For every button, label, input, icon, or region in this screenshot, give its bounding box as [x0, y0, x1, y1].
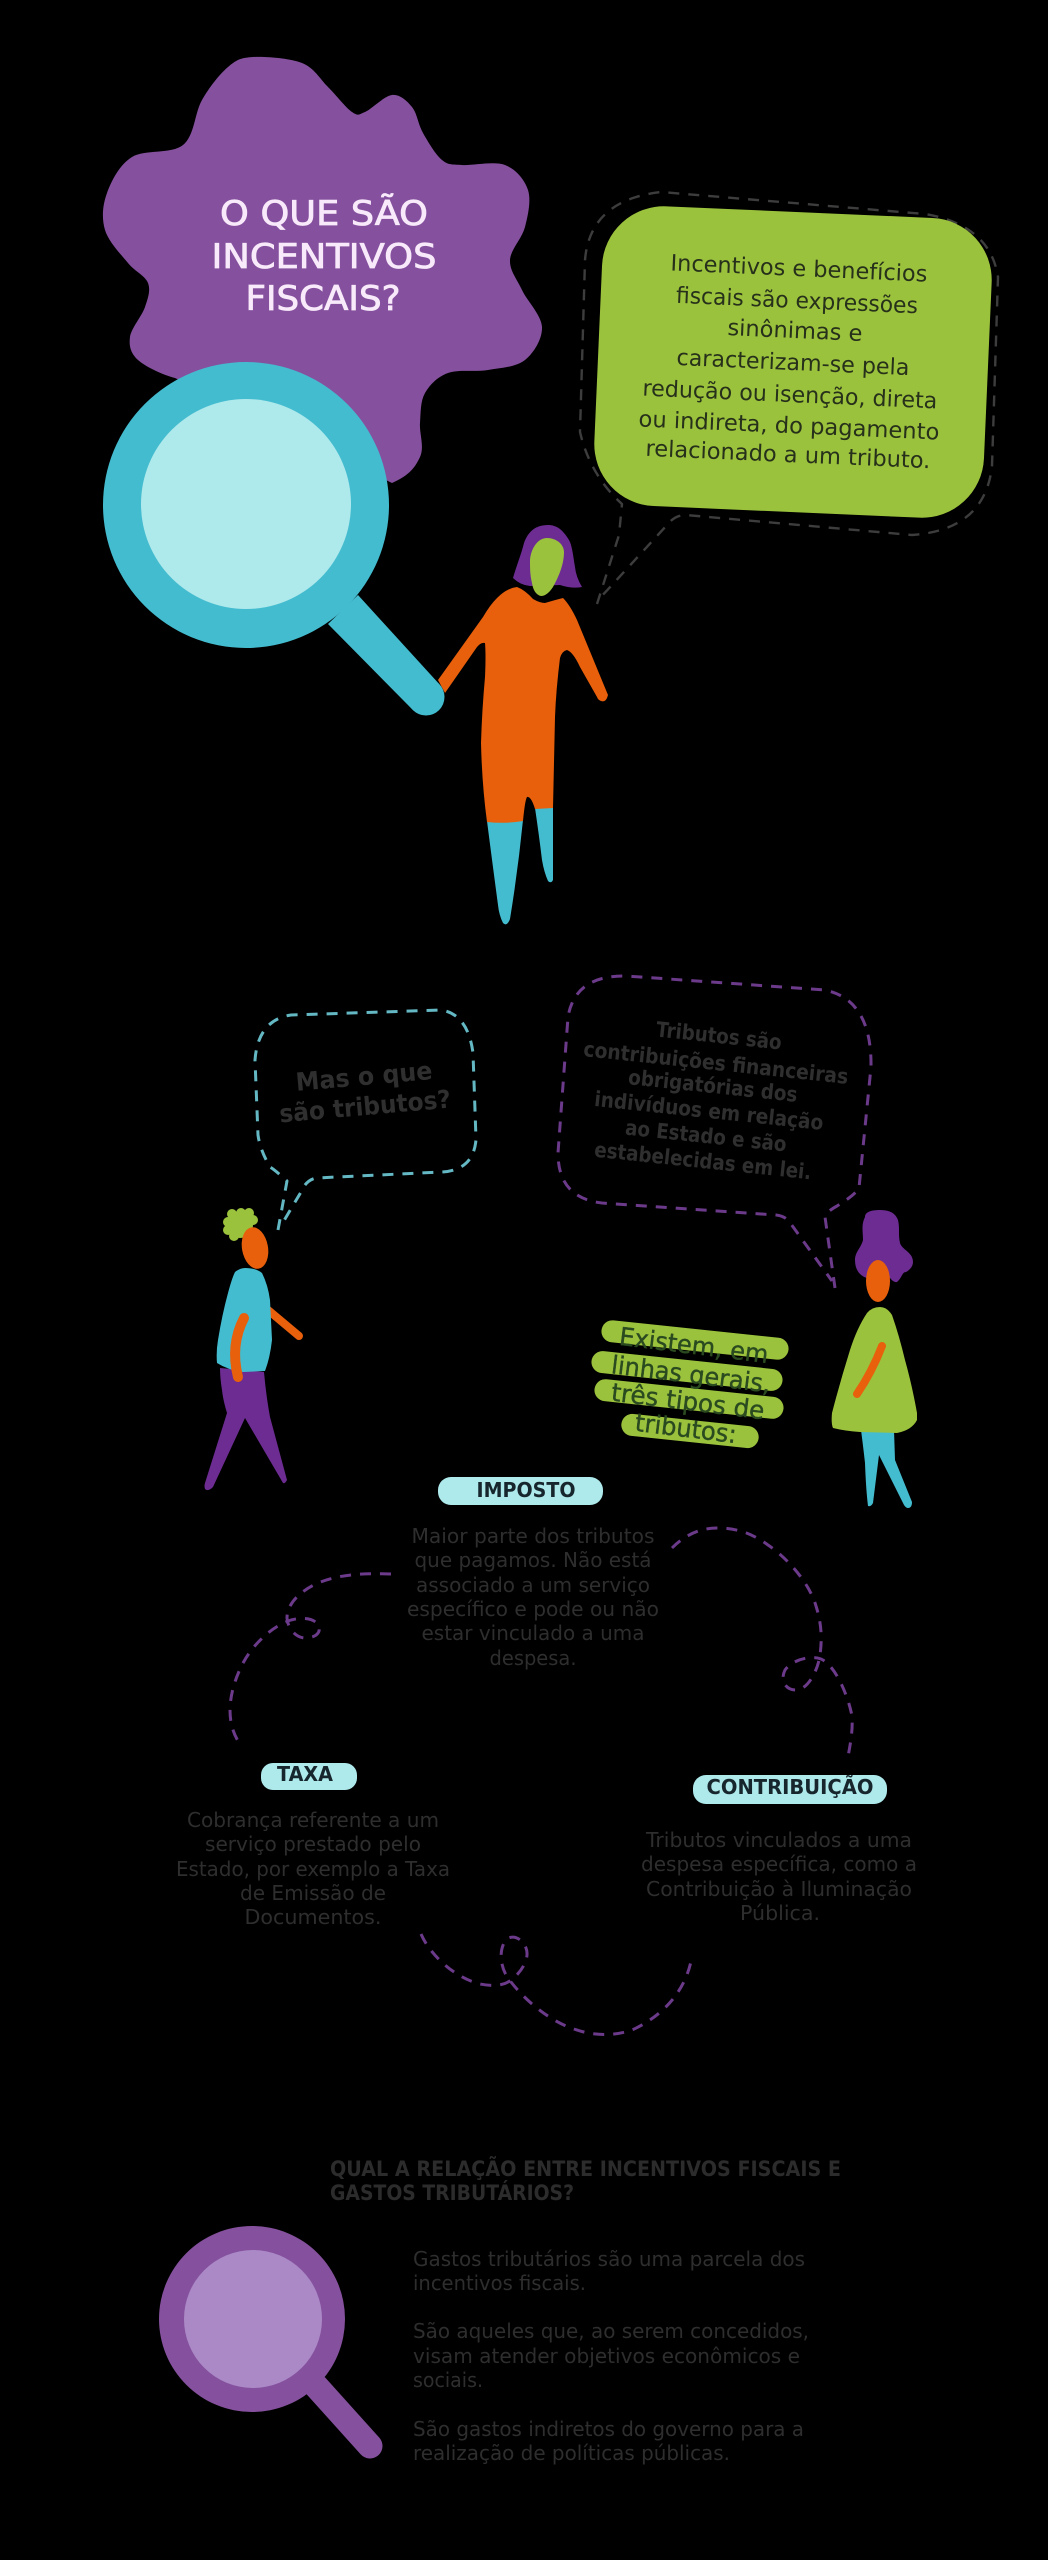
- purple blob: [103, 57, 542, 483]
- description: Contribuição à Iluminação: [646, 1877, 912, 1901]
- description: Cobrança referente a um: [187, 1808, 439, 1832]
- definition text: contribuições financeiras: [582, 1037, 849, 1089]
- definition text: indivíduos em relação: [593, 1087, 825, 1135]
- text block: three types highlighted: Existem, em: [618, 1322, 770, 1369]
- title: FISCAIS?: [246, 279, 400, 319]
- text block: three types highlighted: [590, 1319, 790, 1449]
- panel: imposto: IMPOSTO: [476, 1478, 576, 1502]
- panel: relation between incentives and tax expenditures: [159, 2156, 841, 2465]
- question text: [278, 1056, 452, 1128]
- description: de Emissão de: [240, 1881, 386, 1905]
- bubble text: fiscais são expressões: [676, 283, 918, 319]
- panel: taxa: TAXA: [277, 1762, 333, 1786]
- heading: QUAL A RELAÇÃO ENTRE INCENTIVOS FISCAIS E: [330, 2156, 841, 2181]
- icon: large blue magnifying glass: [103, 362, 444, 716]
- arrow: dashed loop from imposto to taxa: [230, 1574, 391, 1747]
- description: que pagamos. Não está: [414, 1548, 652, 1572]
- panel: title blob with heading: [103, 57, 542, 483]
- description: Maior parte dos tributos: [412, 1524, 654, 1548]
- bubble text: relacionado a um tributo.: [645, 436, 931, 474]
- panel: contribuicao: CONTRIBUIÇÃO: [706, 1775, 874, 1799]
- text block: three types highlighted: tributos:: [634, 1408, 738, 1449]
- panel: definition speech bubble: [558, 976, 871, 1288]
- title: [212, 194, 436, 319]
- definition text: Tributos são: [655, 1017, 783, 1055]
- description: estar vinculado a uma: [422, 1621, 644, 1645]
- body text: São gastos indiretos do governo para a: [413, 2417, 804, 2441]
- title: INCENTIVOS: [212, 237, 436, 277]
- body text: São aqueles que, ao serem concedidos,: [413, 2319, 809, 2343]
- bubble text: sinônimas e: [727, 315, 863, 347]
- description: associado a um serviço: [416, 1573, 650, 1597]
- question text: Mas o que: [295, 1056, 434, 1097]
- text block: three types highlighted: linhas gerais,: [610, 1350, 772, 1399]
- panel: contribuicao: [641, 1775, 917, 1925]
- description: despesa específica, como a: [641, 1852, 917, 1876]
- description: Documentos.: [244, 1905, 382, 1929]
- question text: são tributos?: [278, 1085, 452, 1128]
- body text: incentivos fiscais.: [413, 2271, 586, 2295]
- definition text: obrigatórias dos: [627, 1065, 799, 1107]
- label pill: [261, 1763, 357, 1790]
- description: serviço prestado pelo: [205, 1832, 421, 1856]
- definition text: estabelecidas em lei.: [593, 1138, 813, 1184]
- dashed bubble outline: [558, 976, 871, 1288]
- heading: GASTOS TRIBUTÁRIOS?: [330, 2180, 574, 2205]
- definition text: ao Estado e são: [624, 1116, 788, 1156]
- figure: woman in green dress: [832, 1210, 917, 1508]
- dashed bubble outline: [580, 192, 998, 604]
- arrow: dashed loop from imposto to contribuicao: [672, 1528, 852, 1757]
- description: Estado, por exemplo a Taxa: [176, 1857, 450, 1881]
- description: [641, 1828, 917, 1925]
- description: específico e pode ou não: [407, 1597, 659, 1621]
- panel: taxa: [176, 1762, 450, 1929]
- body text: realização de políticas públicas.: [413, 2441, 730, 2465]
- figure: woman in orange holding magnifier: [438, 525, 608, 924]
- panel: question speech bubble: [255, 1010, 476, 1230]
- description: Tributos vinculados a uma: [645, 1828, 912, 1852]
- bubble text: Incentivos e benefícios: [670, 250, 928, 288]
- description: [407, 1524, 659, 1670]
- bubble text: caracterizam-se pela: [676, 345, 910, 381]
- icon: purple magnifying glass: [159, 2226, 370, 2446]
- text block: three types highlighted: três tipos de: [610, 1378, 766, 1425]
- figure: man with curly green hair: [204, 1208, 299, 1490]
- body text: [413, 2247, 809, 2465]
- panel: green speech bubble: [580, 192, 998, 604]
- body text: Gastos tributários são uma parcela dos: [413, 2247, 805, 2271]
- body text: visam atender objetivos econômicos e: [413, 2344, 800, 2368]
- description: despesa.: [490, 1646, 576, 1670]
- description: [176, 1808, 450, 1929]
- arrow: dashed loop from taxa to contribuicao: [421, 1934, 692, 2034]
- bubble text: ou indireta, do pagamento: [638, 406, 940, 446]
- panel: imposto: [407, 1477, 659, 1670]
- green bubble: [592, 204, 994, 520]
- dashed bubble outline: [255, 1010, 476, 1230]
- label pill: [438, 1477, 603, 1505]
- description: Pública.: [740, 1901, 820, 1925]
- label pill: [693, 1775, 887, 1804]
- title: O QUE SÃO: [220, 194, 428, 234]
- definition text: [582, 1017, 849, 1184]
- bubble text: redução ou isenção, direta: [642, 376, 938, 414]
- heading: [330, 2156, 841, 2205]
- bubble text: [638, 250, 940, 474]
- body text: sociais.: [413, 2368, 483, 2392]
